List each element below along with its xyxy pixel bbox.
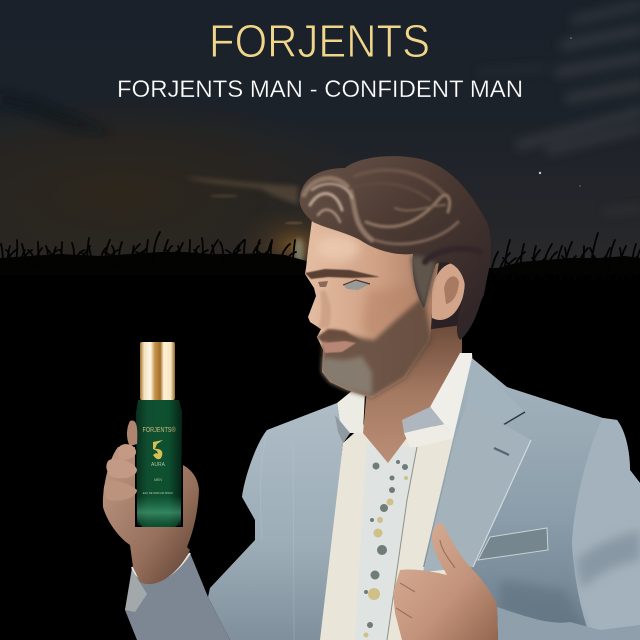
crop stalks right <box>490 233 640 280</box>
nose shade <box>318 290 331 328</box>
jacket right body <box>423 358 640 640</box>
jacket dark gap <box>500 580 583 640</box>
holding fingers <box>104 420 137 501</box>
night sky background <box>0 0 640 295</box>
hair grey temple <box>411 256 436 308</box>
bottle glass <box>136 400 182 527</box>
title: FORJENTS <box>209 15 430 67</box>
wispy clouds right <box>480 5 640 212</box>
neck <box>363 325 462 463</box>
holding hand <box>103 447 199 584</box>
bottle variant: MEN <box>154 478 162 482</box>
crop stalks second row <box>5 250 296 268</box>
upper lapel right <box>467 360 525 425</box>
jacket left side <box>208 403 343 640</box>
forehead light <box>316 234 360 262</box>
dark cloud left <box>0 92 112 134</box>
dark field silhouette <box>0 232 640 640</box>
bottle brand: FORJENTS® <box>142 426 176 434</box>
hand knuckle creases <box>396 540 455 618</box>
ear <box>432 263 465 320</box>
shirt collar left <box>335 390 365 443</box>
shirt <box>320 410 480 640</box>
shirt cuff <box>132 553 190 581</box>
lapel edge <box>473 440 531 567</box>
bottle small print: EAU DE PARFUM SPRAY <box>143 491 173 495</box>
bottle name: AURA <box>151 462 166 468</box>
sleeve shade <box>576 530 640 590</box>
perfume bottle <box>136 342 182 527</box>
sun glow at horizon <box>294 238 304 266</box>
shirt collar right <box>402 353 473 447</box>
tan cloud near hair <box>184 177 298 205</box>
bottle base highlight <box>137 496 181 526</box>
grey chin beard <box>322 356 372 395</box>
jacket right cuff <box>497 607 640 640</box>
man with perfume <box>103 156 640 640</box>
eyebrow <box>305 269 380 279</box>
floral shirt placket <box>355 443 417 640</box>
jacket right sleeve <box>572 418 640 640</box>
moustache <box>317 329 362 342</box>
eye <box>318 280 370 290</box>
sleeve inner cuff <box>125 570 147 612</box>
subtitle: FORJENTS MAN - CONFIDENT MAN <box>117 76 523 103</box>
forearm sleeve <box>125 553 230 640</box>
jacket pocket <box>478 528 548 560</box>
crop stalks <box>1 232 295 268</box>
lapel buttonhole <box>494 448 509 455</box>
lapel notch shade <box>503 412 525 425</box>
bottle logo <box>153 440 163 459</box>
lips <box>322 341 356 353</box>
lower lapel right <box>423 403 531 572</box>
hair behind head <box>430 240 493 342</box>
cheek shade <box>362 280 428 345</box>
hair <box>300 156 491 340</box>
stars <box>539 172 541 174</box>
bottle cap <box>140 342 175 400</box>
thumbs-up hand <box>393 523 498 640</box>
beard <box>322 296 432 398</box>
hair highlights <box>304 170 480 262</box>
jacket seams <box>260 432 294 640</box>
face <box>305 220 440 398</box>
